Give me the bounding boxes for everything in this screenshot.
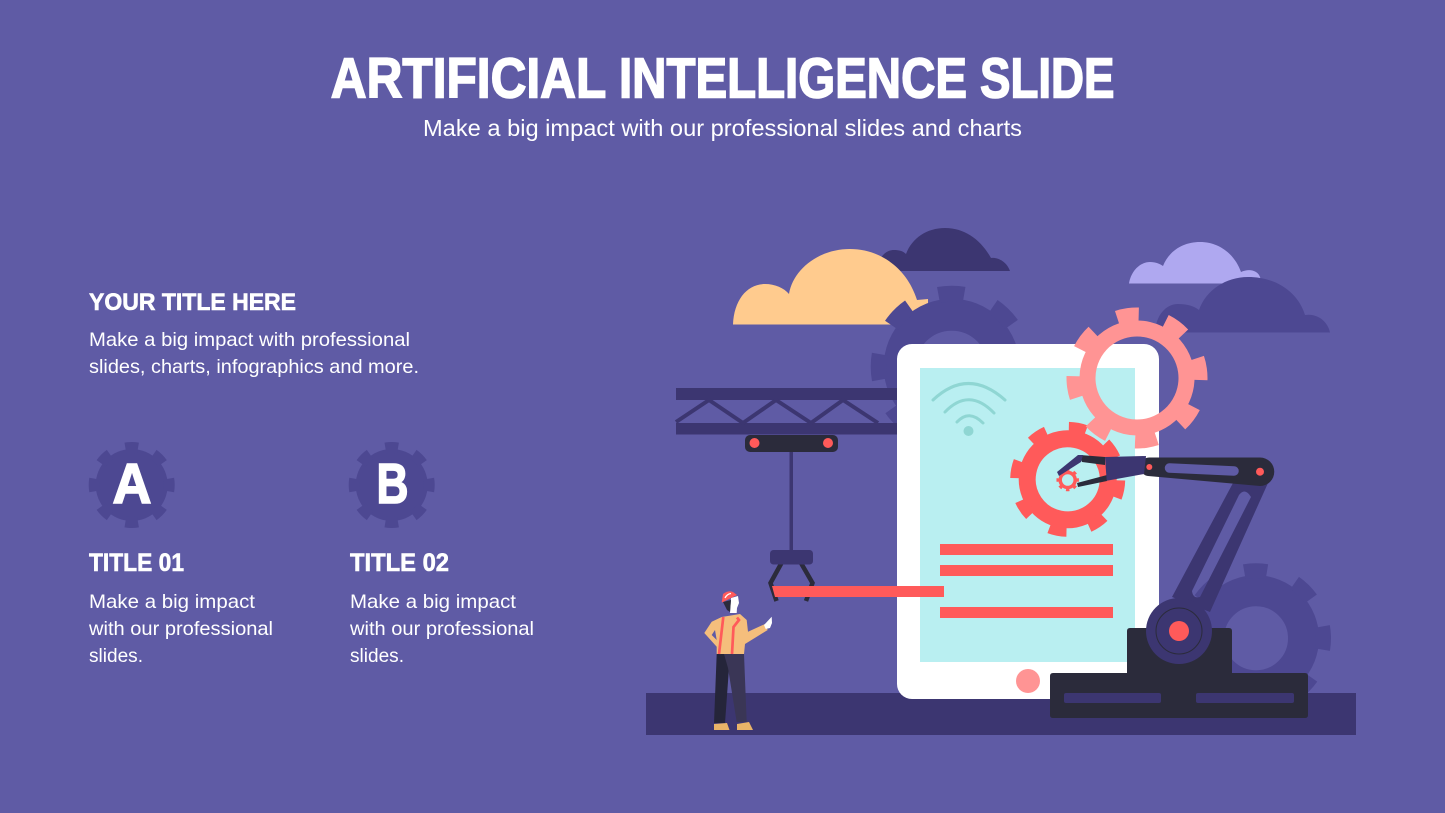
cloud: dark navy <box>877 228 1010 271</box>
body: item A text: with our professional <box>88 618 273 640</box>
icon: gear badge B <box>354 448 429 522</box>
crane truss <box>676 388 901 434</box>
heading: title 02: TITLE 02 <box>350 549 449 577</box>
icon: gear badge A: A <box>112 452 152 516</box>
cloud: back right <box>1155 277 1330 332</box>
tablet screen <box>920 368 1135 662</box>
title: SLIDE <box>980 46 1114 110</box>
icon: wifi <box>933 384 1005 436</box>
intro heading: YOUR TITLE HERE <box>89 289 296 316</box>
worker head <box>722 591 739 613</box>
worker figure <box>704 591 772 730</box>
intro body <box>89 329 419 378</box>
panel: item A <box>88 448 273 667</box>
illustration: AI robot arm and tablet <box>646 228 1356 735</box>
gear: background top <box>879 294 1025 440</box>
worker torso and arms <box>704 614 768 654</box>
text lines on screen <box>940 544 1113 618</box>
robot gripper <box>1057 455 1146 487</box>
intro body: slides, charts, infographics and more. <box>89 356 419 378</box>
subtitle: Make a big impact with our professional slides and charts <box>423 115 1022 141</box>
gear: small held by robot <box>1058 470 1077 490</box>
body: item A text: slides. <box>89 645 143 667</box>
title <box>331 46 1114 110</box>
robot arm <box>1050 455 1308 718</box>
base slots <box>1064 693 1294 703</box>
title: ARTIFICIAL <box>331 46 606 110</box>
lifted red bar <box>772 586 944 597</box>
body: item A text: Make a big impact <box>89 591 256 613</box>
cloud: lavender <box>1129 242 1262 284</box>
worker shoes <box>714 722 753 730</box>
robot joint <box>1146 598 1212 664</box>
worker legs <box>714 654 730 723</box>
intro body: Make a big impact with professional <box>89 329 410 351</box>
gear: pink <box>1066 307 1208 449</box>
icon: gear badge B: B <box>376 452 408 516</box>
gear: red <box>1007 419 1128 540</box>
crane trolley <box>745 435 838 452</box>
heading: title 01: TITLE 01 <box>89 549 184 577</box>
tablet <box>897 344 1159 699</box>
tablet home button <box>1016 669 1040 693</box>
cloud: peach <box>733 249 928 324</box>
body: item B text: slides. <box>350 645 404 667</box>
body: item A text <box>88 591 273 667</box>
worker suspenders <box>719 617 739 654</box>
gear: background bottom <box>1188 571 1324 706</box>
body: item B text <box>349 591 534 667</box>
body: item B text: Make a big impact <box>350 591 517 613</box>
ground <box>646 693 1356 735</box>
robot upper arm <box>1140 458 1274 486</box>
crane claw <box>770 550 813 601</box>
crane cable <box>790 452 793 551</box>
panel: item B <box>349 448 534 667</box>
body: item B text: with our professional <box>349 618 534 640</box>
title: INTELLIGENCE <box>619 46 967 110</box>
text block: intro <box>89 289 419 378</box>
icon: gear badge A <box>94 448 169 522</box>
robot lower arm <box>1172 483 1268 612</box>
worker hand <box>764 617 772 629</box>
robot base <box>1050 628 1308 718</box>
